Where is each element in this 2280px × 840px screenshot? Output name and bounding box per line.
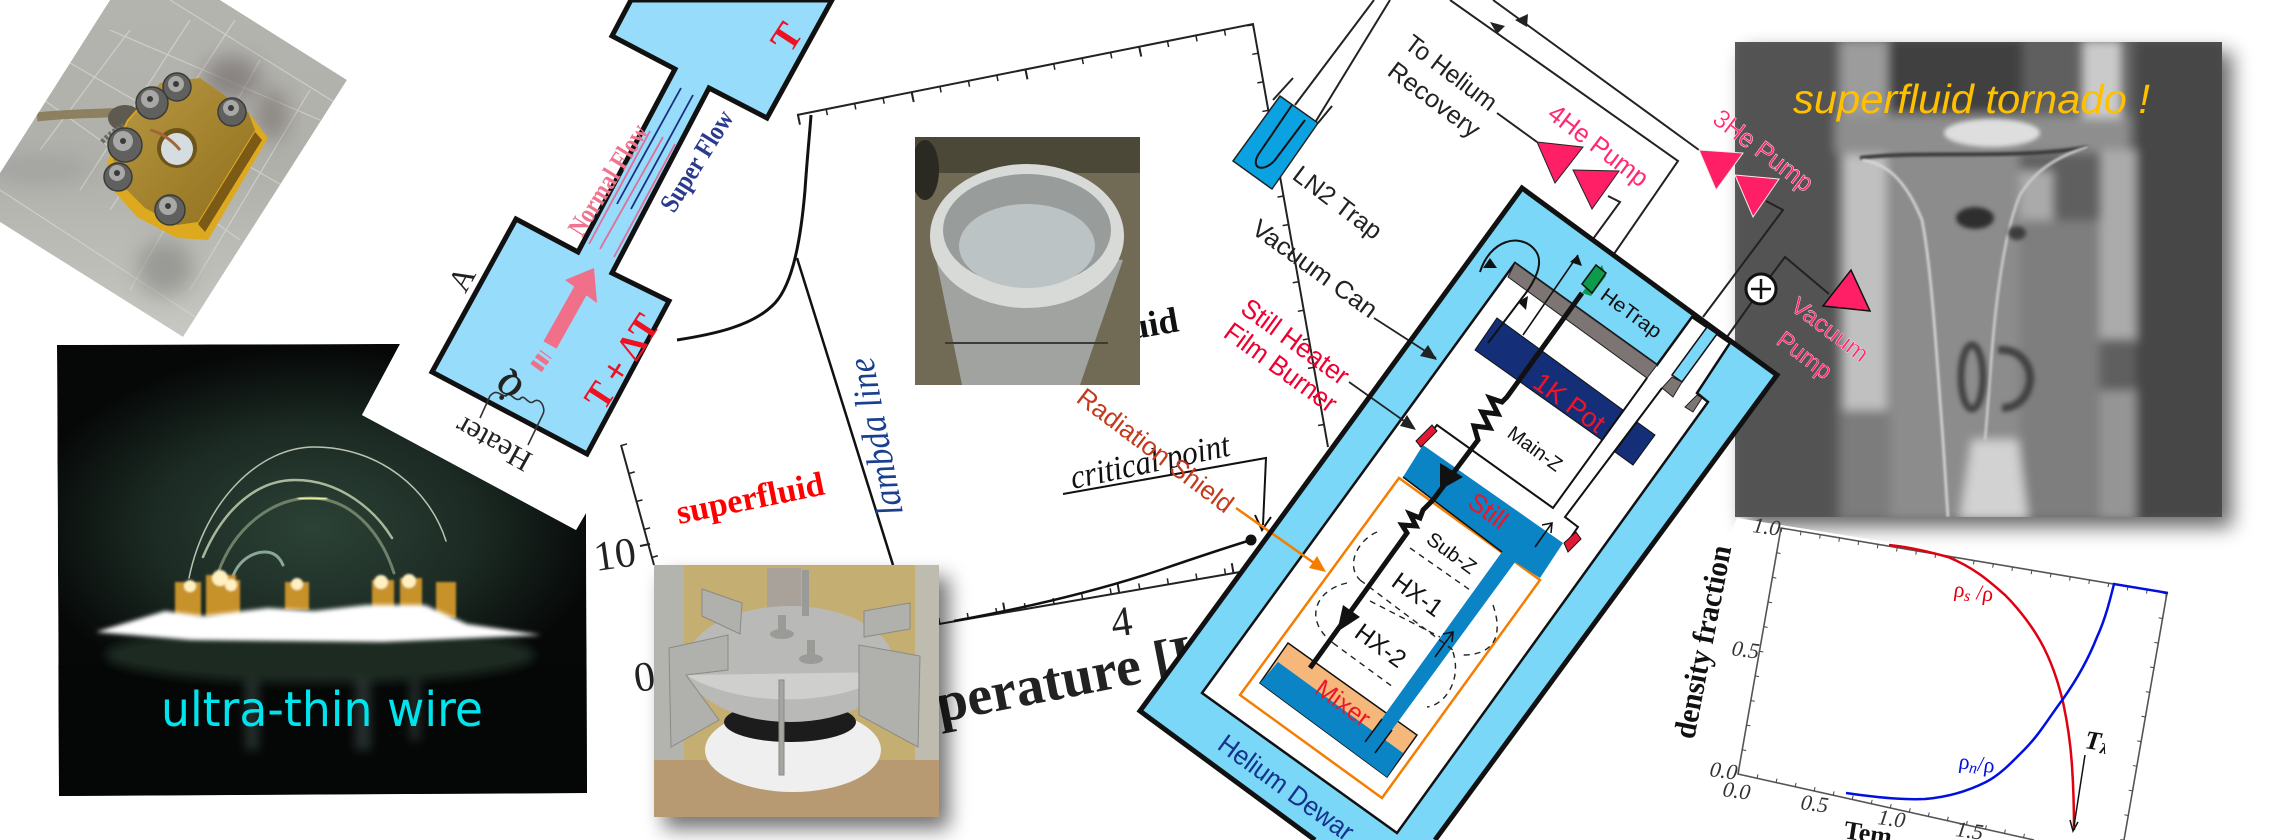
axis labels: 4: [1108, 598, 1135, 647]
internal labels: HX-1: [1386, 567, 1448, 623]
dewar outline: [1140, 188, 1777, 840]
labels: recovery and trap: Vacuum Can: [1246, 214, 1383, 324]
internal labels: Main-Z: [1503, 422, 1566, 476]
labels: recovery and trap: To Helium: [1399, 29, 1502, 117]
label: Super Flow: Super Flow: [654, 104, 740, 217]
axis labels: 0.5: [1799, 789, 1830, 818]
photo: ultra-thin wire: [57, 344, 587, 800]
axis labels: 10: [591, 530, 639, 581]
inner vacuum can and tube walls: [1420, 378, 1662, 543]
4He pumps: [1537, 142, 1619, 209]
chart: density fraction: n: [1968, 760, 1978, 778]
LN2 trap: [1233, 96, 1318, 189]
label: 1K Pot: 1K Pot: [1528, 367, 1611, 439]
axis labels: 0.0: [1721, 776, 1752, 805]
curve labels: ρ: [1952, 576, 1967, 602]
label: Vacuum Pump: [1771, 292, 1874, 385]
internal labels: Sub-Z: [1422, 528, 1480, 579]
curve labels: s: [1963, 588, 1971, 605]
helium return loop: [1480, 241, 1539, 343]
arrows: normal flow: [589, 131, 675, 257]
chip body: [104, 638, 536, 686]
label: 4He Pump: 4He Pump: [1542, 98, 1655, 193]
label: 3He Pump: 3He Pump: [1707, 103, 1820, 198]
photo: bucket of liquid helium: [911, 137, 1140, 385]
labels: recovery and trap: Recovery: [1382, 56, 1486, 144]
still: [1365, 445, 1563, 753]
chart: density fraction: [1667, 512, 2168, 840]
text: superfluid tornado: superfluid tornado !: [1793, 76, 2150, 122]
loop arrowheads: [1483, 255, 1582, 310]
label: A: A: [440, 260, 483, 297]
y axis title: density fraction: [1667, 542, 1738, 741]
label: critical point: critical point: [1067, 427, 1235, 497]
condensing line: [1310, 293, 1582, 668]
label: Still Heater Film Burner: Still Heater: [1235, 293, 1355, 391]
funnel: [1862, 160, 1948, 517]
icon: braided wire: [37, 112, 122, 117]
label: normal fluid: normal fluid: [984, 299, 1181, 372]
label: T lambda: T: [2083, 725, 2103, 756]
vapor pressure curve and critical point: [954, 540, 1251, 621]
bolts: [770, 570, 823, 664]
channel outline: [432, 0, 832, 454]
phase diagram axes: [621, 24, 1328, 624]
bright substrate: [96, 605, 541, 642]
grey thermal band: [1508, 263, 1657, 378]
icon: centre window: [157, 128, 197, 168]
label: Still: Still: [1463, 486, 1514, 535]
still heaters: [1416, 425, 1581, 552]
vacuum cavity: [1202, 263, 1730, 833]
wire arcs: [189, 447, 446, 578]
label: superfluid: superfluid: [673, 466, 828, 532]
ladder textures: [1893, 180, 1931, 517]
photo: baffle plate assembly: [654, 565, 939, 817]
dewar body: [1140, 188, 1777, 840]
photo: superfluid tornado: [1735, 40, 2226, 520]
melting curve: [677, 115, 811, 340]
axis labels: 1.0: [1751, 512, 1782, 541]
axis labels: Temperature [K]: [829, 616, 1239, 755]
photo shadow: [1745, 52, 2232, 527]
icon: heater coil: [480, 392, 544, 445]
mixer: [1260, 643, 1417, 777]
axis labels: 0: [631, 653, 658, 702]
axis labels: [591, 530, 1239, 755]
diagram: heat flow channel: [432, 0, 832, 478]
label: Radiation Shield: Radiation Shield: [1071, 382, 1240, 519]
chart panel background: [1680, 518, 2180, 840]
diagram: dilution refrigerator: [1071, 0, 1874, 840]
label: Mixer: Mixer: [1310, 674, 1376, 733]
leader arrows: [1236, 318, 1436, 570]
axis labels: 0.0: [1708, 756, 1739, 785]
icon: screws: [104, 73, 246, 225]
axis labels: 1.0: [1876, 804, 1907, 833]
dark marks: [1961, 345, 2030, 409]
surface line: [1860, 147, 2088, 158]
fins: [669, 589, 920, 775]
photo shadow: [664, 577, 949, 829]
photo: sample cell on graph paper: [0, 0, 347, 337]
icon: brass holder: [107, 78, 268, 240]
internal labels: [1349, 284, 1666, 674]
internal labels: HX-2: [1349, 618, 1411, 674]
chart: density fraction: /ρ: [1976, 751, 1997, 778]
label: Vacuum Pump: Pump: [1771, 326, 1837, 385]
label: Heater: Heater: [450, 409, 537, 478]
3He pumps: [1699, 150, 1779, 217]
axis labels: 0.5: [1730, 635, 1761, 664]
shield: [1240, 478, 1540, 798]
label: Normal Flow: Normal Flow: [562, 118, 654, 241]
arrows: super flow: [617, 88, 693, 209]
text: ultra-thin wire: ultra-thin wire: [161, 682, 483, 738]
small flow arrows: [1435, 255, 1578, 657]
label: Vacuum Pump: Vacuum: [1785, 292, 1874, 368]
label: Q dot: Q̇: [491, 364, 528, 407]
arrow: T lambda: [2070, 755, 2085, 831]
lines to pumps: [1273, 0, 1829, 337]
1K pot: [1475, 318, 1655, 465]
chart: helium phase diagram: [591, 24, 1328, 755]
heat exchangers: [1316, 532, 1497, 707]
labels: recovery and trap: LN2 Trap: [1287, 160, 1387, 245]
He trap: [1582, 265, 1606, 296]
dark spacer: [724, 712, 856, 742]
chart: density fraction: ρ: [1957, 748, 1972, 774]
vacuum pump: [1823, 270, 1870, 311]
flow arrowheads: [1490, 14, 1528, 34]
label: T + delta T: T + ΔT: [576, 307, 668, 417]
label: T lambda: λ: [2098, 741, 2108, 758]
contact pins: [175, 570, 456, 618]
blue neck strip: [1672, 327, 1717, 382]
valve: [1746, 274, 1776, 304]
grey stops: [1662, 377, 1702, 412]
critical point pointer: [1063, 458, 1271, 530]
internal labels: HeTrap: [1596, 284, 1666, 343]
plate: [686, 606, 894, 722]
axis labels: [1708, 512, 1985, 840]
white base ring: [705, 720, 881, 792]
lambda line: [797, 258, 893, 565]
axes box: [1738, 528, 2167, 840]
curve labels: /ρ: [1969, 579, 1995, 606]
label: lambda line: lambda line: [840, 354, 912, 519]
labels: recovery and trap: [1246, 29, 1502, 324]
label: Still Heater Film Burner: Film Burner: [1218, 317, 1343, 418]
density curves: [1889, 545, 2074, 830]
label: T: T: [762, 15, 811, 60]
arrow: heat current: [536, 268, 597, 368]
